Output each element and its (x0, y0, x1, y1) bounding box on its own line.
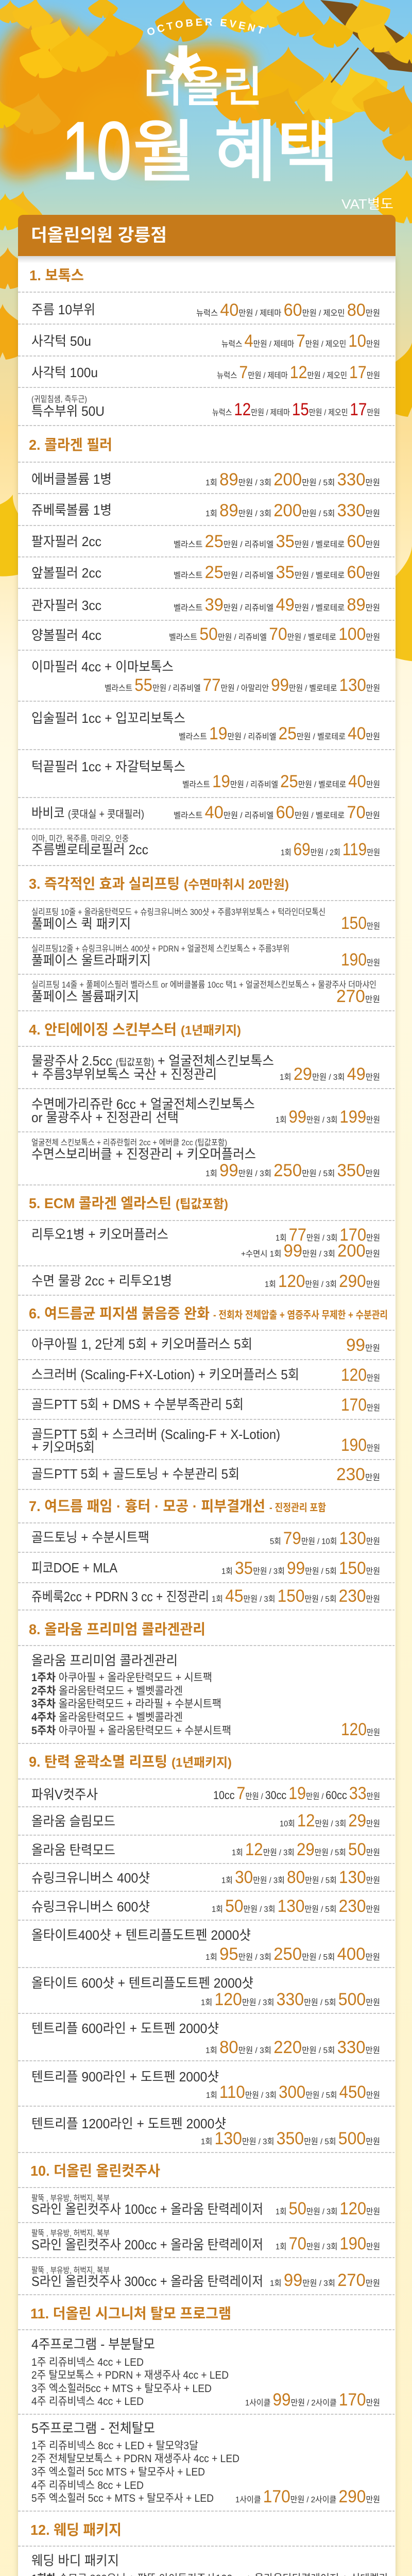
row: 골드토닝 (31, 1529, 380, 1548)
row: 앞볼필러 2cc (31, 563, 380, 582)
row: 입술필러 (31, 710, 380, 743)
heading: section 9: 9. 탄력 윤곽소멸 리프팅 (29, 1754, 167, 1770)
row: 5주프로그램: 2주 전체탈모보톡스 + PDRN 재생주사 4cc + LED (31, 2453, 239, 2465)
heading: section 12: 12. 웨딩 패키지 (30, 2522, 122, 2538)
row: 아쿠아필: 아쿠아필 1, 2단계 5회 + 키오머플러스 5회 (31, 1336, 252, 1352)
row: 올라움 탄력모드: 올라움 탄력모드 (31, 1842, 115, 1858)
row: 팔자필러 2cc: 팔자필러 2cc (31, 534, 101, 549)
row: 올라움 프리미엄 콜라겐관리 (31, 1653, 380, 1739)
row: 사각턱 50u (31, 331, 380, 351)
row: 바비코 (31, 803, 380, 822)
row: 올라움 슬림모드: 올라움 슬림모드 (31, 1814, 115, 1829)
row: 4주프로그램: 3주 엑소힐러5cc + MTS + 탈모주사 + LED (31, 2383, 212, 2395)
heading: section 7: - 진정관리 포함 (269, 1502, 326, 1514)
row: 수면메가리쥬란 (31, 1096, 380, 1127)
row: 올라움 슬림모드 (31, 1811, 380, 1831)
heading: section 10: 10. 더올린 올린컷주사 (30, 2163, 160, 2179)
row: 텐트리플 600라인 (31, 2021, 380, 2057)
row: S라인 100cc: 1회 50만원 / 3회 120만원 (276, 2199, 380, 2218)
row: 텐트리플 900라인: 1회 110만원 / 3회 300만원 / 5회 450만원 (206, 2082, 380, 2102)
row: 입술필러: 입술필러 1cc + 입꼬리보톡스 (31, 710, 185, 726)
row: 앞볼필러 2cc: 벨라스트 25만원 / 리쥬비엘 35만원 / 벨로테로 60만원 (174, 563, 380, 582)
heading: section 11: 11. 더올린 시그니처 탈모 프로그램 (30, 2306, 231, 2321)
row: 슈링크유니버스 400샷 (31, 1868, 380, 1887)
blurred orange foliage (0, 15, 255, 178)
row: 리투오1병: 리투오1병 + 키오머플러스 (31, 1227, 168, 1242)
row: 슈링크유니버스 400샷: 1회 30만원 / 3회 80만원 / 5회 130만원 (221, 1868, 380, 1887)
row: 올타이트400샷: 올타이트400샷 + 텐트리플도트펜 2000샷 (31, 1927, 251, 1943)
row: 리투오1병: +수면시 1회 99만원 / 3회 200만원 (241, 1241, 380, 1261)
row: 올라움 슬림모드: 10회 12만원 / 3회 29만원 (280, 1811, 380, 1831)
row: 텐트리플 600라인: 텐트리플 600라인 + 도트펜 2000샷 (31, 2021, 219, 2036)
row: 5주프로그램: 5주 엑소힐러 5cc + MTS + 탈모주사 + LED (31, 2493, 214, 2504)
heading: section 5: 5. ECM 콜라겐 엘라스틴 (29, 1195, 171, 1211)
row: 사각턱 100u: 뉴럭스 7만원 / 제테마 12만원 / 제오민 17만원 (217, 363, 380, 382)
row: 4주프로그램: 4주프로그램 - 부분탈모 (31, 2336, 155, 2352)
row: 올타이트400샷 (31, 1927, 380, 1964)
row: 풀페이스 볼륨패키지: 270만원 (336, 987, 380, 1006)
row: 관자필러 3cc: 관자필러 3cc (31, 598, 101, 613)
row: 에버클볼륨 1병: 에버클볼륨 1병 (31, 471, 112, 487)
row: 5주프로그램 (31, 2420, 380, 2506)
heading: section 6: 6. 여드름균 피지샘 붉음증 완화 (29, 1306, 210, 1321)
row: 올타이트 600샷: 올타이트 600샷 + 텐트리플도트펜 2000샷 (31, 1975, 253, 1991)
row: 올타이트400샷: 1회 95만원 / 3회 250만원 / 5회 400만원 (205, 1944, 380, 1964)
row: 골드PTT 스크러버 (31, 1427, 380, 1455)
row: 올라움 프리미엄 콜라겐관리: 5주차 아쿠아필 + 올라움탄력모드 + 수분시트팩 (31, 1725, 231, 1737)
row: 스크러버: 스크러버 (Scaling-F+X-Lotion) + 키오머플러스 5회 (31, 1367, 299, 1382)
heading: section 5: (팁값포함) (176, 1197, 228, 1211)
row: 주름벨로테로필러: 1회 69만원 / 2회 119만원 (281, 840, 380, 859)
row: 입술필러: 벨라스트 19만원 / 리쥬비엘 25만원 / 벨로테로 40만원 (179, 724, 380, 743)
row: 골드PTT DMS: 골드PTT 5회 + DMS + 수분부족관리 5회 (31, 1397, 244, 1412)
heading: section 4: 4. 안티에이징 스킨부스터 (29, 1022, 177, 1038)
row: 풀페이스 울트라패키지: 190만원 (341, 950, 380, 970)
row: 앞볼필러 2cc: 앞볼필러 2cc (31, 565, 101, 581)
row: 이마필러: 이마필러 4cc + 이마보톡스 (31, 659, 174, 674)
row: 아쿠아필 (31, 1335, 380, 1355)
row: 올라움 탄력모드 (31, 1840, 380, 1859)
brand logo (143, 45, 263, 111)
row: 바비코: 바비코 (콧대실 + 콧대필러) (31, 805, 144, 821)
row: 수면메가리쥬란: 1회 99만원 / 3회 199만원 (276, 1107, 380, 1127)
row: 턱끝필러: 턱끝필러 1cc + 자갈턱보톡스 (31, 759, 185, 774)
row: 턱끝필러: 벨라스트 19만원 / 리쥬비엘 25만원 / 벨로테로 40만원 (182, 772, 380, 791)
row: 스크러버 (31, 1365, 380, 1385)
row: S라인 200cc: S라인 올린컷주사 200cc + 올라움 탄력레이저 (31, 2237, 263, 2252)
row: 양볼필러 4cc: 양볼필러 4cc (31, 628, 101, 643)
row: 사각턱 100u (31, 363, 380, 382)
row: 바비코: 벨라스트 40만원 / 리쥬비엘 60만원 / 벨로테로 70만원 (174, 803, 380, 822)
row: 풀페이스 볼륨패키지: 풀페이스 볼륨패키지 (31, 989, 139, 1004)
row: 웨딩 바디 패키지: 웨딩 바디 패키지 (31, 2553, 119, 2568)
row: 5주프로그램: 3주 엑소힐러 5cc MTS + 탈모주사 + LED (31, 2466, 205, 2478)
row: 골드PTT 골드토닝 (31, 1465, 380, 1484)
row: 올라움 프리미엄 콜라겐관리: 3주차 올라움탄력모드 + 라라필 + 수분시트팩 (31, 1698, 221, 1710)
row: 텐트리플 1200라인: 1회 130만원 / 3회 350만원 / 5회 500만원 (201, 2129, 380, 2148)
row: 올타이트 600샷: 1회 120만원 / 3회 330만원 / 5회 500만원 (201, 1990, 380, 2009)
row: 풀페이스 울트라패키지 (31, 944, 380, 970)
row: 골드PTT 골드토닝: 230만원 (336, 1465, 380, 1484)
row: 피코DOE (31, 1558, 380, 1578)
heading: section 7: 7. 여드름 패임 · 흉터 · 모공 · 피부결개선 (29, 1498, 265, 1514)
row: 관자필러 3cc: 벨라스트 39만원 / 리쥬비엘 49만원 / 벨로테로 89만원 (174, 595, 380, 615)
row: S라인 300cc: 팔뚝 , 부유방, 허벅지, 복부 (31, 2266, 110, 2275)
main title: 월 혜택 (133, 114, 339, 190)
row: 4주프로그램: 4주 리쥬비넥스 4cc + LED (31, 2396, 144, 2408)
row: 특수부위 50U: 뉴럭스 12만원 / 제테마 15만원 / 제오민 17만원 (212, 400, 380, 419)
row: 올라움 프리미엄 콜라겐관리: 2주차 올라움탄력모드 + 벨벳콜라겐 (31, 1685, 183, 1697)
row: 리투오1병: 1회 77만원 / 3회 170만원 (276, 1225, 380, 1245)
row: 4주프로그램: 1주 리쥬비넥스 4cc + LED (31, 2357, 144, 2368)
row: S라인 200cc (31, 2229, 380, 2253)
row: 파워V컷주사: 10cc 7만원 / 30cc 19만원 / 60cc 33만원 (213, 1784, 380, 1803)
row: 풀페이스 볼륨패키지 (31, 980, 380, 1006)
row: S라인 300cc (31, 2266, 380, 2290)
row: 사각턱 50u: 사각턱 50u (31, 333, 91, 349)
row: 풀페이스 울트라패키지: 풀페이스 울트라패키지 (31, 953, 151, 968)
row: 수면메가리쥬란: or 물광주사 + 진정관리 선택 (31, 1110, 179, 1125)
row: 슈링크유니버스 600샷: 슈링크유니버스 600샷 (31, 1899, 150, 1914)
row: 주름벨로테로필러 (31, 834, 380, 859)
row: 쥬베룩볼륨 1병: 쥬베룩볼륨 1병 (31, 502, 112, 518)
row: 특수부위 50U: (귀밑침샘, 측두근) (31, 395, 87, 404)
row: 주름 10부위 (31, 300, 380, 320)
row: 풀페이스 퀵 패키지: 풀페이스 퀵 패키지 (31, 916, 131, 931)
row: 수면스보리버클: 얼굴전체 스킨보톡스 + 리쥬란힐러 2cc + 에버클 2cc (팁값포함) (31, 1138, 227, 1147)
row: 파워V컷주사: 파워V컷주사 (31, 1787, 98, 1802)
row: 사각턱 100u: 사각턱 100u (31, 365, 98, 380)
row: 올라움 프리미엄 콜라겐관리: 올라움 프리미엄 콜라겐관리 (31, 1653, 178, 1668)
brand logo: 더올린 (143, 64, 263, 111)
row: 텐트리플 1200라인 (31, 2116, 380, 2148)
row: 쥬베룩볼륨 1병 (31, 501, 380, 520)
row: 올라움 프리미엄 콜라겐관리: 4주차 올라움탄력모드 + 벨벳콜라겐 (31, 1711, 183, 1723)
row: 물광주사 패키지: 1회 29만원 / 3회 49만원 (280, 1064, 380, 1084)
row: 수면스보리버클 (31, 1138, 380, 1180)
row: S라인 200cc: 팔뚝 , 부유방, 허벅지, 복부 (31, 2229, 110, 2238)
row: 골드PTT 스크러버: 골드PTT 5회 + 스크러버 (Scaling-F + X-Lotion) (31, 1427, 280, 1442)
row: 수면메가리쥬란: 수면메가리쥬란 6cc + 얼굴전체스킨보톡스 (31, 1096, 255, 1112)
row: 올라움 프리미엄 콜라겐관리: 120만원 (341, 1720, 380, 1739)
row: 텐트리플 900라인: 텐트리플 900라인 + 도트펜 2000샷 (31, 2069, 219, 2084)
row: 에버클볼륨 1병: 1회 89만원 / 3회 200만원 / 5회 330만원 (205, 470, 380, 489)
row: 풀페이스 울트라패키지: 실리프팅12줄 + 슈링크유니버스 400샷 + PDRN + 얼굴전체 스킨보톡스 + 주름3부위 (31, 944, 289, 954)
ginkgo leaves and branch (0, 0, 412, 673)
row: 4주프로그램: 1사이클 99만원 / 2사이클 170만원 (245, 2390, 380, 2410)
VAT note: VAT별도 (341, 196, 393, 212)
row: 리투오1병 (31, 1225, 380, 1261)
row: 수면 물광: 수면 물광 2cc + 리투오1병 (31, 1273, 172, 1289)
panel header (18, 215, 396, 263)
row: 이마필러: 벨라스트 55만원 / 리쥬비엘 77만원 / 아말리안 99만원 / 벨로테로 130만원 (105, 675, 380, 695)
row: 쥬베룩 PDRN: 쥬베룩2cc + PDRN 3 cc + 진정관리 (31, 1589, 209, 1604)
row: 피코DOE: 피코DOE + MLA (31, 1560, 118, 1575)
row: 이마필러 (31, 659, 380, 695)
row: 골드PTT 스크러버: 190만원 (341, 1435, 380, 1455)
row: 텐트리플 600라인: 1회 80만원 / 3회 220만원 / 5회 330만원 (205, 2038, 380, 2057)
row: 골드토닝: 5회 79만원 / 10회 130만원 (270, 1529, 380, 1548)
row: 5주프로그램: 1주 리쥬비넥스 8cc + LED + 탈모약3달 (31, 2440, 198, 2452)
row: S라인 200cc: 1회 70만원 / 3회 190만원 (276, 2234, 380, 2253)
row: S라인 100cc: 팔뚝 , 부유방, 허벅지, 복부 (31, 2194, 110, 2203)
row: 쥬베룩 PDRN (31, 1586, 380, 1606)
row: 특수부위 50U: 특수부위 50U (31, 403, 105, 419)
row: 팔자필러 2cc: 벨라스트 25만원 / 리쥬비엘 35만원 / 벨로테로 60만원 (174, 532, 380, 551)
row: 슈링크유니버스 600샷 (31, 1896, 380, 1916)
row: 주름벨로테로필러: 주름벨로테로필러 2cc (31, 842, 148, 857)
heading: section 3: 3. 즉각적인 효과 실리프팅 (29, 876, 180, 892)
row: S라인 300cc: 1회 99만원 / 3회 270만원 (270, 2270, 380, 2290)
row: 골드PTT 골드토닝: 골드PTT 5회 + 골드토닝 + 수분관리 5회 (31, 1466, 239, 1482)
heading: section 2: 2. 콜라겐 필러 (29, 437, 112, 453)
row: 텐트리플 900라인 (31, 2069, 380, 2102)
row: 풀페이스 퀵 패키지 (31, 907, 380, 933)
row: 양볼필러 4cc (31, 624, 380, 644)
main title: 10 (62, 106, 131, 196)
row: 5주프로그램: 1사이클 170만원 / 2사이클 290만원 (235, 2487, 380, 2506)
row: 골드PTT 스크러버: + 키오머5회 (31, 1439, 95, 1455)
heading: section 3: (수면마취시 20만원) (184, 878, 289, 892)
row: 골드PTT DMS (31, 1395, 380, 1415)
row: 주름 10부위: 뉴럭스 40만원 / 제테마 60만원 / 제오민 80만원 (196, 300, 380, 320)
row: 아쿠아필: 99만원 (346, 1335, 380, 1355)
row: 에버클볼륨 1병 (31, 470, 380, 489)
row: 골드토닝: 골드토닝 + 수분시트팩 (31, 1530, 149, 1545)
row: 사각턱 50u: 뉴럭스 4만원 / 제테마 7만원 / 제오민 10만원 (221, 331, 380, 351)
row: 수면 물광: 1회 120만원 / 3회 290만원 (265, 1272, 380, 1291)
row: S라인 300cc: S라인 올린컷주사 300cc + 올라움 탄력레이저 (31, 2274, 263, 2289)
heading: section 8: 8. 올라움 프리미엄 콜라겐관리 (29, 1621, 205, 1637)
row: 물광주사 패키지: + 주름3부위보톡스 국산 + 진정관리 (31, 1066, 217, 1082)
row: 풀페이스 퀵 패키지: 150만원 (341, 913, 380, 933)
row: 슈링크유니버스 400샷: 슈링크유니버스 400샷 (31, 1870, 150, 1886)
row: 턱끝필러 (31, 759, 380, 791)
row: 쥬베룩 PDRN: 1회 45만원 / 3회 150만원 / 5회 230만원 (212, 1586, 380, 1606)
row: 올라움 탄력모드: 1회 12만원 / 3회 29만원 / 5회 50만원 (232, 1840, 380, 1859)
row: 올타이트 600샷 (31, 1975, 380, 2009)
row: 물광주사 패키지: 물광주사 2.5cc (팁값포함) + 얼굴전체스킨보톡스 (31, 1053, 274, 1069)
curved heading: October Event: OCTOBER EVENT (147, 19, 265, 35)
row: 특수부위 50U (31, 395, 380, 419)
panel header: 더올린의원 강릉점 (31, 226, 167, 245)
row: 팔자필러 2cc (31, 532, 380, 551)
row: 스크러버: 120만원 (341, 1365, 380, 1385)
row: 주름벨로테로필러: 이마, 미간, 목주름, 마리오, 인중 (31, 834, 129, 843)
row: 물광주사 패키지 (31, 1053, 380, 1084)
heading: section 1: 1. 보톡스 (29, 267, 84, 283)
heading: section 4: (1년패키지) (181, 1024, 241, 1038)
row: 4주프로그램 (31, 2336, 380, 2410)
row: 텐트리플 1200라인: 텐트리플 1200라인 + 도트펜 2000샷 (31, 2116, 226, 2131)
row: 양볼필러 4cc: 벨라스트 50만원 / 리쥬비엘 70만원 / 벨로테로 100만원 (169, 624, 380, 644)
row: 웨딩 바디 패키지 (31, 2553, 388, 2576)
row: 올라움 프리미엄 콜라겐관리: 1주차 아쿠아필 + 올라운탄력모드 + 시트팩 (31, 1672, 212, 1684)
row: 수면스보리버클: 수면스보리버클 + 진정관리 + 키오머플러스 (31, 1146, 256, 1162)
row: 피코DOE: 1회 35만원 / 3회 99만원 / 5회 150만원 (221, 1558, 380, 1578)
row: 골드PTT DMS: 170만원 (341, 1395, 380, 1415)
row: 수면스보리버클: 1회 99만원 / 3회 250만원 / 5회 350만원 (205, 1161, 380, 1180)
row: 주름 10부위: 주름 10부위 (31, 302, 95, 317)
row: S라인 100cc (31, 2194, 380, 2218)
row: 수면 물광 (31, 1272, 380, 1291)
row: 쥬베룩볼륨 1병: 1회 89만원 / 3회 200만원 / 5회 330만원 (205, 501, 380, 520)
heading: section 9: (1년패키지) (171, 1756, 232, 1770)
row: 풀페이스 퀵 패키지: 실리프팅 10줄 + 올라움탄력모드 + 슈링크유니버스 300샷 + 주름3부위보톡스 + 턱라인더모톡신 (31, 907, 325, 917)
row: 관자필러 3cc (31, 595, 380, 615)
row: 5주프로그램: 4주 리쥬비넥스 8cc + LED (31, 2480, 144, 2492)
row: 4주프로그램: 2주 탈모보톡스 + PDRN + 재생주사 4cc + LED (31, 2369, 229, 2381)
row: 5주프로그램: 5주프로그램 - 전체탈모 (31, 2420, 155, 2436)
main title (62, 106, 339, 196)
row: 파워V컷주사 (31, 1784, 380, 1803)
heading: section 3 (29, 876, 289, 892)
heading: section 6 (29, 1306, 388, 1321)
row: S라인 100cc: S라인 올린컷주사 100cc + 올라움 탄력레이저 (31, 2201, 263, 2217)
row: 슈링크유니버스 600샷: 1회 50만원 / 3회 130만원 / 5회 230만원 (212, 1896, 380, 1916)
